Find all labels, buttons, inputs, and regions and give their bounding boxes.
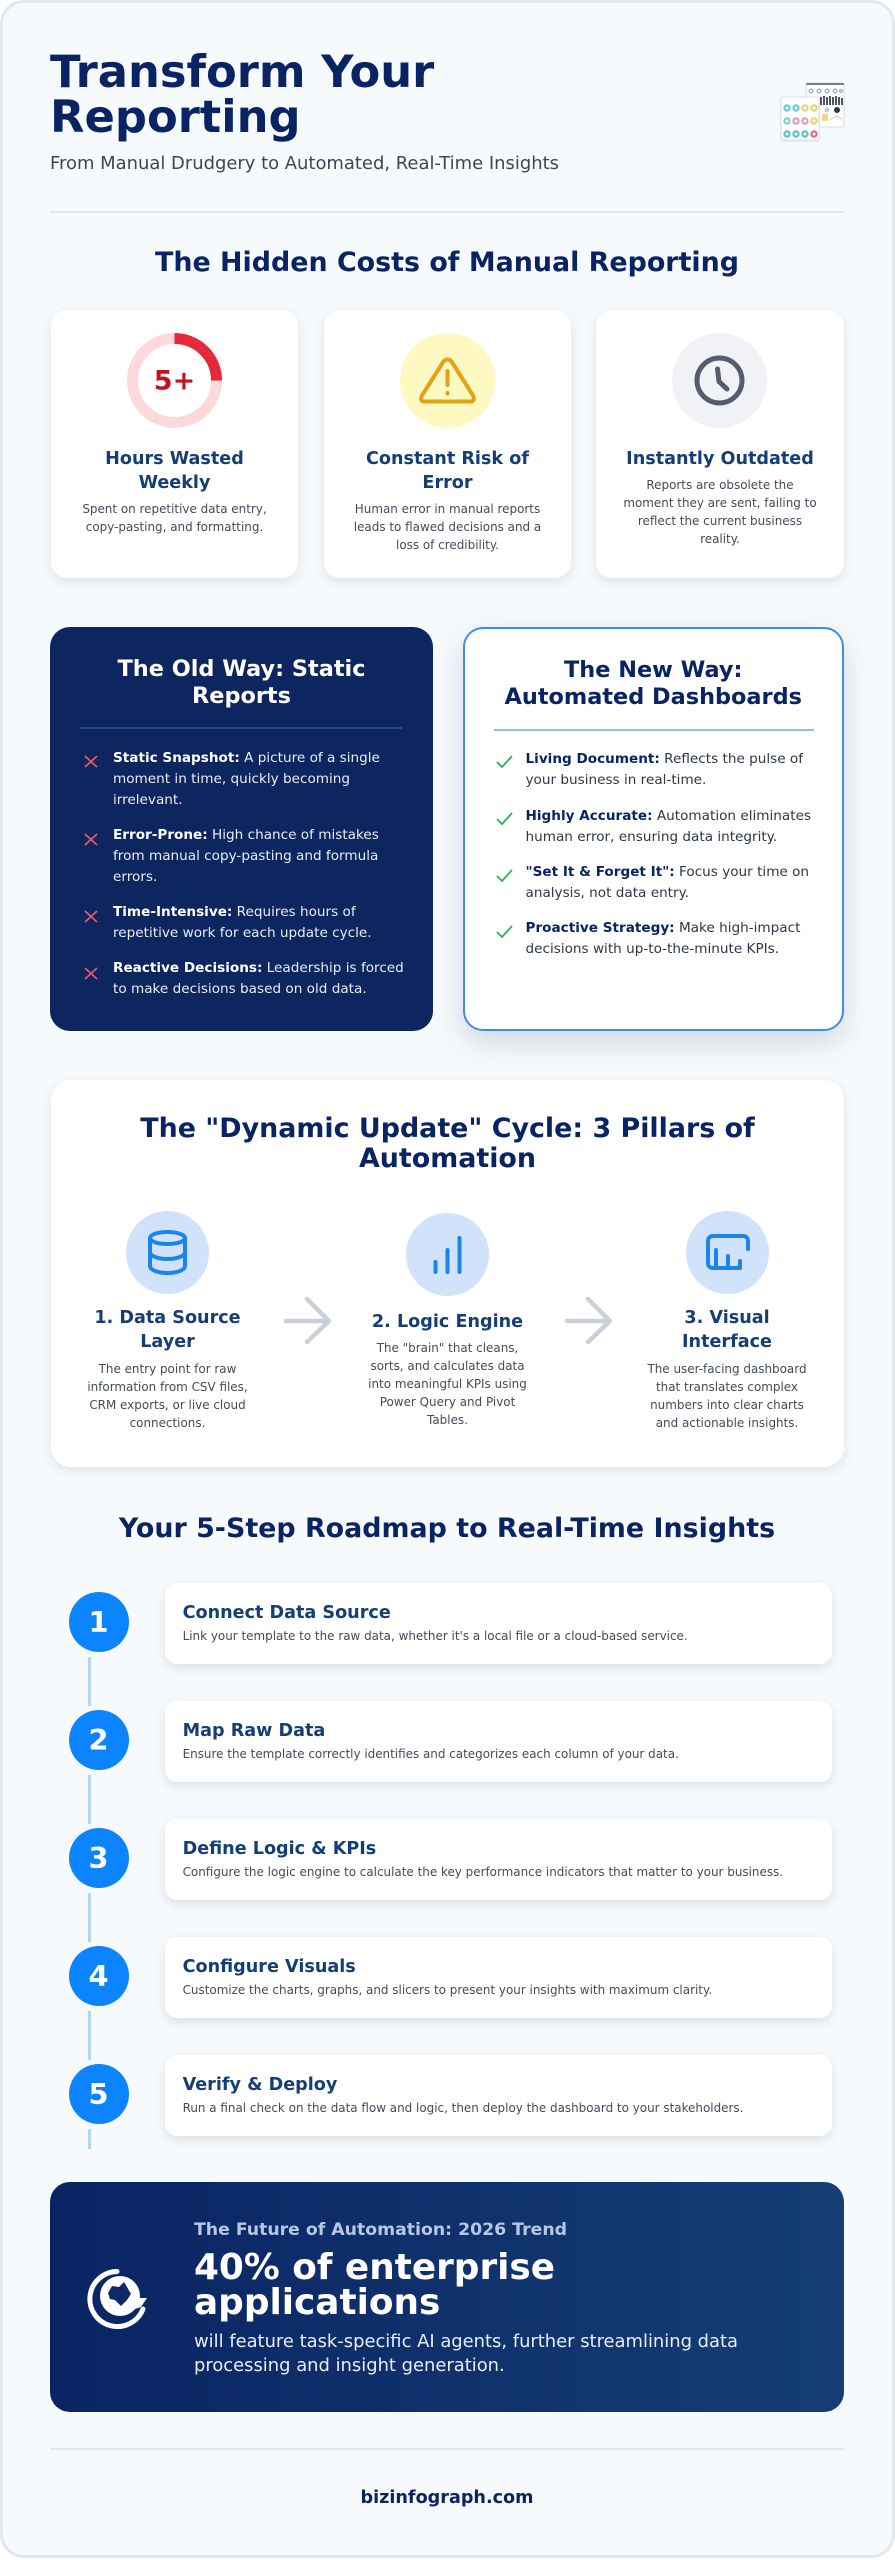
step card: Run a final check on the data flow and logic, then deploy the dashboard to your stakeholders. (183, 2101, 743, 2115)
list item: "Set It & Forget It": Focus your time on (526, 864, 809, 880)
list item: Living Document: Reflects the pulse of (526, 751, 803, 767)
card text: moment they are sent, failing to (623, 496, 817, 510)
icon: check (496, 925, 513, 938)
step card: Configure Visuals (183, 1957, 356, 1977)
pillar title (682, 1308, 772, 1352)
card text: loss of credibility. (396, 538, 499, 552)
step 2 (69, 1710, 835, 1824)
pillar text: information from CSV files, (87, 1380, 248, 1394)
icon: check (496, 812, 513, 825)
pillar text: into meaningful KPIs using (368, 1377, 527, 1391)
pillar text (87, 1362, 248, 1430)
heading: hidden costs: The Hidden Costs of Manual Reporting (155, 247, 739, 278)
card text (623, 478, 817, 546)
icon: cross (84, 967, 98, 980)
card text: leads to flawed decisions and a (354, 520, 541, 534)
icon: bars (406, 1213, 489, 1296)
callout text: will feature task-specific AI agents, further streamlining data (194, 2331, 738, 2352)
list item: errors. (113, 869, 157, 885)
panel: risk of error (324, 310, 571, 578)
card title: Constant Risk of (366, 448, 529, 468)
pillar text: CRM exports, or live cloud (89, 1398, 246, 1412)
subtitle: From Manual Drudgery to Automated, Real-Time Insights (50, 153, 559, 174)
title (50, 45, 434, 143)
list item: Reactive Decisions: Leadership is forced (113, 960, 404, 976)
callout text (194, 2330, 738, 2378)
title: Reporting (50, 90, 301, 143)
icon: warning triangle (400, 333, 494, 428)
pillar title: Interface (682, 1332, 772, 1352)
panel heading: Reports (192, 683, 291, 709)
icon: dashboard thumbnails (780, 82, 844, 142)
panel heading (118, 656, 365, 709)
panel: old way (50, 627, 433, 1031)
panel heading: The "Dynamic Update" Cycle: 3 Pillars of (140, 1113, 755, 1144)
step card (165, 2055, 832, 2136)
list item: irrelevant. (113, 792, 183, 808)
pillar text (368, 1341, 527, 1427)
list item: your business in real-time. (526, 772, 706, 788)
pillar text: The user-facing dashboard (647, 1362, 807, 1376)
pillar text: connections. (130, 1416, 205, 1430)
step number: 3 (88, 1841, 109, 1875)
list item (526, 920, 800, 957)
pillar title (94, 1308, 241, 1352)
step 4 (69, 1946, 835, 2060)
list item: decisions with up-to-the-minute KPIs. (526, 941, 779, 957)
step card: Verify & Deploy (183, 2075, 337, 2095)
step number (68, 1710, 128, 1770)
arrow (284, 1296, 332, 1344)
list item (113, 904, 372, 941)
callout statistic (194, 2250, 555, 2320)
icon: check (496, 755, 513, 768)
icon: clock (672, 333, 767, 428)
list item: Static Snapshot: A picture of a single (113, 750, 380, 766)
pillar text: The entry point for raw (99, 1362, 236, 1376)
step number: 1 (88, 1605, 109, 1639)
step 1 (69, 1592, 835, 1706)
callout kicker: The Future of Automation: 2026 Trend (194, 2220, 567, 2240)
step card (165, 1937, 832, 2018)
step card: Ensure the template correctly identifies and categorizes each column of your data. (183, 1747, 679, 1761)
step number: 4 (88, 1959, 109, 1993)
list item (526, 808, 811, 845)
panel heading (140, 1113, 755, 1174)
heading: roadmap: Your 5-Step Roadmap to Real-Time Insights (119, 1513, 775, 1544)
icon: database (126, 1211, 209, 1294)
step card (165, 1701, 832, 1782)
callout statistic: 40% of enterprise (194, 2247, 555, 2288)
card title (105, 448, 244, 492)
list item: Time-Intensive: Requires hours of (113, 904, 356, 920)
card text: Reports are obsolete the (646, 478, 794, 492)
arrow (564, 1296, 612, 1344)
footer: bizinfograph.com (361, 2488, 533, 2508)
icon: cross (84, 833, 98, 846)
step card: Link your template to the raw data, whether it's a local file or a cloud-based service. (183, 1629, 688, 1643)
card text (82, 502, 267, 534)
icon: dashboard chart (686, 1211, 768, 1294)
card title: Hours Wasted (105, 448, 244, 468)
panel heading (504, 657, 802, 710)
pillar title: 3. Visual (684, 1308, 770, 1328)
step number (68, 2064, 128, 2124)
icon: cross (84, 910, 98, 923)
step number: 2 (88, 1723, 109, 1757)
icon: 5+ donut (127, 333, 222, 428)
icon: cross (84, 755, 98, 768)
step card: Customize the charts, graphs, and slicers to present your insights with maximum clarity. (183, 1983, 712, 1997)
step number (68, 1828, 128, 1888)
step number (68, 1946, 128, 2006)
list item (526, 751, 804, 788)
list item: repetitive work for each update cycle. (113, 925, 372, 941)
step number: 5 (88, 2077, 109, 2111)
list item (113, 960, 404, 997)
step 3 (69, 1828, 835, 1942)
icon: 5+ donut: 5+ (154, 366, 195, 396)
pillar title: 2. Logic Engine (372, 1312, 523, 1332)
panel: dynamic update cycle (51, 1080, 844, 1467)
list item: to make decisions based on old data. (113, 981, 367, 997)
card title: Instantly Outdated (626, 448, 814, 468)
list item: Proactive Strategy: Make high-impact (526, 920, 800, 936)
card title (366, 448, 530, 492)
callout statistic: applications (194, 2282, 440, 2323)
card text: Human error in manual reports (355, 502, 540, 516)
step card: Configure the logic engine to calculate the key performance indicators that matter to your business. (183, 1865, 783, 1879)
step card (165, 1583, 832, 1664)
card text (354, 502, 541, 552)
panel heading: Automation (359, 1143, 536, 1174)
list item: from manual copy-pasting and formula (113, 848, 378, 864)
callout text: processing and insight generation. (194, 2355, 505, 2376)
pillar text: numbers into clear charts (650, 1398, 804, 1412)
list item (113, 827, 379, 885)
pillar text: Power Query and Pivot (380, 1395, 515, 1409)
list item: human error, ensuring data integrity. (526, 829, 777, 845)
callout: future of automation (50, 2182, 844, 2412)
icon: check (496, 869, 513, 882)
step card: Connect Data Source (183, 1603, 391, 1623)
card text: Spent on repetitive data entry, (82, 502, 267, 516)
step number (68, 1592, 128, 1652)
pillar title: 1. Data Source (94, 1308, 241, 1328)
list item: analysis, not data entry. (526, 885, 689, 901)
pillar text: Tables. (427, 1413, 468, 1427)
panel heading: Automated Dashboards (505, 684, 802, 710)
icon: automation cycle (87, 2269, 147, 2329)
card text: reality. (700, 532, 740, 546)
panel heading: The New Way: (564, 657, 742, 683)
card title: Error (422, 472, 473, 492)
list item: Highly Accurate: Automation eliminates (526, 808, 811, 824)
pillar text: The "brain" that cleans, (377, 1341, 518, 1355)
step card: Define Logic & KPIs (183, 1839, 376, 1859)
list item (113, 750, 380, 808)
pillar text: sorts, and calculates data (370, 1359, 525, 1373)
step 5 (69, 2064, 835, 2149)
pillar text (647, 1362, 807, 1430)
panel heading: The Old Way: Static (118, 656, 365, 682)
step card (165, 1819, 832, 1900)
step card: Map Raw Data (183, 1721, 325, 1741)
list item: moment in time, quickly becoming (113, 771, 350, 787)
pillar text: and actionable insights. (656, 1416, 798, 1430)
panel: hours wasted (51, 310, 298, 578)
pillar text: that translates complex (656, 1380, 798, 1394)
card text: copy-pasting, and formatting. (86, 520, 263, 534)
panel: instantly outdated (596, 310, 844, 578)
title: Transform Your (50, 45, 434, 98)
card text: reflect the current business (638, 514, 802, 528)
panel: new way (462, 627, 844, 1031)
list item (526, 864, 809, 901)
pillar title: Layer (140, 1332, 195, 1352)
card title: Weekly (139, 472, 210, 492)
list item: Error-Prone: High chance of mistakes (113, 827, 379, 843)
